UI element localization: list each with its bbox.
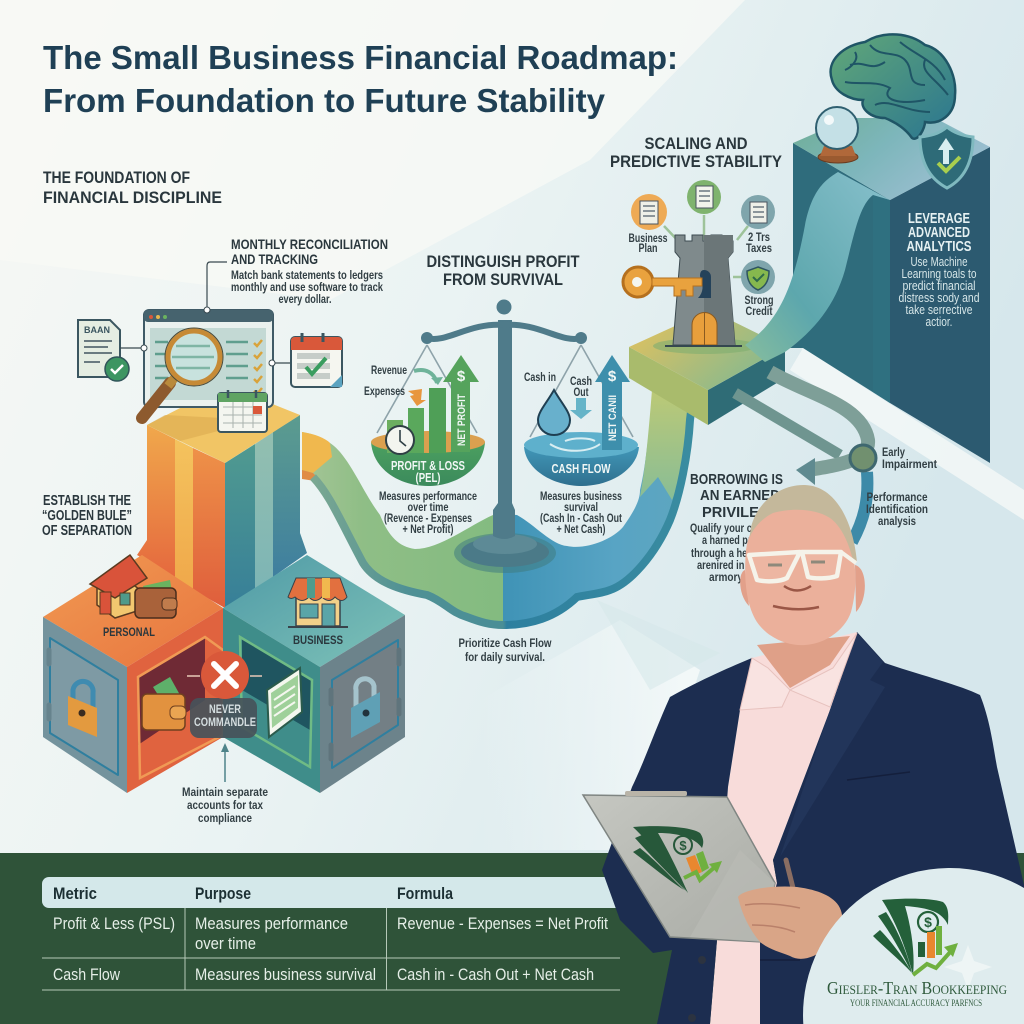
- icon: magnifying glass: [142, 328, 223, 418]
- heading: distinguish profit: FROM SURVIVAL: [443, 270, 563, 289]
- table header: Formula: [397, 884, 453, 903]
- icon: document circle: [687, 180, 721, 214]
- heading: borrowing: BORROWING IS: [690, 471, 783, 488]
- heading: distinguish profit: [426, 252, 580, 289]
- clipboard highlight: [690, 850, 775, 942]
- table header: Purpose: [195, 884, 251, 903]
- block top face: [793, 118, 990, 200]
- text: profit and loss description: (Revence - Expenses: [384, 511, 472, 525]
- text: borrowing description: [690, 521, 772, 584]
- panel: profit and loss pan: [364, 345, 485, 486]
- safe door: [332, 640, 398, 768]
- label: performance identification: Performance: [866, 490, 928, 504]
- finger lines: [745, 904, 800, 932]
- label: personal: PERSONAL: [103, 625, 155, 639]
- label: pan title: (PEL): [416, 471, 440, 485]
- arrow: net cash: $: [608, 368, 617, 385]
- hair: [750, 485, 857, 562]
- table row: profit and loss: [53, 914, 608, 953]
- icon: monitor spreadsheet: [144, 307, 273, 407]
- icon: orange padlock: [68, 681, 97, 737]
- panel: personal vault: [43, 555, 223, 793]
- labels: cash in and out: Cash in: [524, 370, 556, 384]
- text: borrowing description: Qualify your credit: [690, 521, 772, 535]
- pen: [786, 860, 793, 888]
- icon: crystal ball: [816, 107, 858, 163]
- ribbon: yellow start: [302, 432, 332, 473]
- collar: [740, 633, 857, 710]
- heading: leverage analytics: ANALYTICS: [906, 239, 972, 255]
- arrow: net cash: NET CANII: [607, 395, 619, 441]
- text: borrowing description: arenired in your: [697, 558, 767, 572]
- text: borrowing description: armory.: [709, 570, 745, 584]
- door hinges: [331, 650, 399, 759]
- table header: [42, 877, 640, 908]
- table row: profit and loss: Revenue - Expenses = Net Profit: [397, 914, 608, 933]
- arrows: revenue and expenses: [408, 370, 443, 406]
- label: never commandle: NEVER: [209, 702, 241, 716]
- icon: credit shield circle: [741, 260, 775, 294]
- safe door: [50, 638, 118, 775]
- icon: business plan circle: [631, 194, 667, 230]
- icon: clock: [386, 426, 414, 454]
- person with clipboard: [583, 485, 1024, 1024]
- icon: water drop: [538, 390, 570, 435]
- text: prioritize cash flow: for daily survival.: [465, 650, 545, 664]
- labels: revenue and expenses: [364, 363, 407, 398]
- label: strong credit: Credit: [746, 304, 773, 318]
- heading: borrowing: PRIVILEGE: [702, 504, 780, 521]
- icon: wallet inside vault: [142, 677, 186, 730]
- text: monthly description: Match bank statements to ledgers: [231, 268, 383, 282]
- company name: Giesler-Tran Bookkeeping: [827, 978, 1007, 998]
- text: separate accounts: [182, 785, 268, 825]
- tall analytics block: [785, 118, 990, 463]
- recess: personal: [138, 637, 205, 745]
- table row: cash flow: [53, 965, 594, 984]
- arrow: up to vaults: [221, 743, 229, 782]
- heading: leverage analytics: ADVANCED: [908, 225, 970, 241]
- clipboard: [583, 795, 775, 942]
- heading: borrowing: AN EARNED: [700, 487, 780, 504]
- icon: balance scale: [421, 300, 587, 573]
- label: never commandle: [190, 698, 257, 738]
- heading: scaling: PREDICTIVE STABILITY: [610, 152, 783, 171]
- roadmap ribbon: [302, 390, 697, 625]
- icon: taxes circle: [741, 195, 775, 229]
- labels: revenue and expenses: Expenses: [364, 384, 405, 398]
- text: borrowing description: through a healthy: [691, 546, 769, 560]
- ribbon: rising green section: [640, 390, 697, 500]
- text: profit and loss description: over time: [408, 500, 449, 514]
- heading: the foundation: THE FOUNDATION OF: [43, 168, 190, 187]
- text: monthly description: monthly and use software to track: [231, 280, 383, 294]
- sparkle: [944, 945, 992, 990]
- heading: borrowing: [690, 471, 783, 521]
- ribbon edge: [313, 395, 693, 625]
- clipboard logo: $: [679, 838, 687, 853]
- text: prioritize cash flow: Prioritize Cash Flow: [458, 636, 552, 650]
- door hinges: [46, 650, 52, 719]
- label: never commandle: COMMANDLE: [194, 715, 256, 729]
- text: profit and loss description: + Net Profit): [402, 522, 454, 536]
- circle: early impairment marker: [850, 445, 876, 471]
- upward ribbon: [745, 172, 890, 362]
- logo badge: [803, 868, 1024, 1024]
- label: business: BUSINESS: [293, 633, 343, 647]
- text: analytics description: take serrective: [906, 303, 973, 317]
- tower platform: [629, 310, 785, 425]
- label: pan title: PROFIT & LOSS: [391, 459, 465, 473]
- label: pan title: [391, 459, 465, 485]
- table row: profit and loss: Measures performance: [195, 914, 348, 933]
- icon: no-mixing cross: [187, 651, 262, 699]
- label: cash flow: CASH FLOW: [552, 462, 611, 476]
- face: [745, 505, 855, 645]
- icon: brain: [831, 34, 955, 139]
- panel: business vault: [223, 555, 405, 793]
- text: cash flow description: (Cash In - Cash Out: [540, 511, 622, 525]
- bottom band: [0, 853, 1024, 1024]
- text: cash flow description: + Net Cash): [556, 522, 606, 536]
- text: cash flow description: Measures business: [540, 489, 622, 503]
- text: separate accounts: compliance: [198, 811, 252, 825]
- shirt: [710, 632, 857, 1024]
- ribbon: blue half: [503, 420, 690, 625]
- labels: revenue and expenses: Revenue: [371, 363, 407, 377]
- text: cash flow description: survival: [564, 500, 598, 514]
- label: early impairment: [882, 445, 937, 471]
- text: analytics description: distress sody and: [898, 291, 980, 305]
- arrow: net profit: $: [457, 368, 466, 385]
- comparison table: [42, 877, 640, 990]
- label: business plan: [628, 231, 668, 255]
- eyes: [768, 562, 825, 565]
- icon: house: [90, 555, 147, 618]
- table row: cash flow: Cash in - Cash Out + Net Cash: [397, 965, 594, 984]
- ears: [740, 565, 865, 612]
- text: analytics description: predict financial: [902, 279, 976, 293]
- icon: small calendar: [218, 390, 267, 432]
- label: performance identification: Identification: [866, 502, 928, 516]
- labels: cash in and out: [524, 370, 592, 399]
- heading: scaling: SCALING AND: [644, 134, 748, 153]
- grey curved arrows: [735, 372, 868, 542]
- heading: scaling: [610, 134, 783, 171]
- arrow: cash out: [570, 398, 592, 419]
- label: strong credit: Strong: [744, 293, 774, 307]
- text: cash flow description: [540, 489, 622, 536]
- heading: distinguish profit: DISTINGUISH PROFIT: [426, 252, 580, 271]
- text: prioritize cash flow: [458, 636, 552, 664]
- label: performance identification: analysis: [878, 514, 916, 528]
- block right face: [890, 147, 990, 463]
- glasses: [749, 552, 856, 581]
- icon: castle tower: [664, 215, 748, 346]
- heading: golden rule: “GOLDEN BULE”: [42, 508, 132, 524]
- column: foundation pillar: [137, 385, 307, 608]
- text: separate accounts: Maintain separate: [182, 785, 268, 799]
- icon: storefront: [288, 578, 348, 627]
- title: The Small Business Financial Roadmap:: [43, 39, 678, 76]
- arrow: net profit: NET PROFIT: [456, 394, 468, 446]
- heading: golden rule: OF SEPARATION: [42, 523, 132, 539]
- label: early impairment: Impairment: [882, 457, 937, 471]
- text: separate accounts: accounts for tax: [187, 798, 263, 812]
- text: analytics description: actior.: [926, 315, 952, 329]
- bar chart: [387, 388, 446, 453]
- label: business plan: Plan: [638, 241, 658, 255]
- heading: golden rule: ESTABLISH THE: [43, 493, 131, 509]
- heading: leverage analytics: LEVERAGE: [908, 211, 970, 227]
- arrow: net cash: [595, 355, 630, 450]
- jacket: [602, 632, 1024, 1024]
- label: taxes: Taxes: [746, 241, 772, 255]
- text: borrowing description: a harned profile: [702, 533, 770, 547]
- label: business plan: Business: [628, 231, 668, 245]
- icon: shield: [920, 127, 973, 188]
- arrow: net profit: [443, 355, 479, 452]
- panel: cash flow pan: [524, 345, 639, 486]
- neck: [757, 636, 850, 688]
- hand: [738, 887, 842, 959]
- tagline: YOUR FINANCIAL ACCURACY PARFNCS: [850, 999, 982, 1009]
- text: analytics description: [898, 255, 980, 329]
- logo mark: [873, 899, 958, 975]
- heading: the foundation: [43, 168, 222, 207]
- table row: cash flow: Cash Flow: [53, 965, 121, 984]
- text: monthly description: [231, 268, 383, 306]
- text: analytics description: Use Machine: [910, 255, 968, 269]
- logo mark: $: [924, 914, 932, 930]
- heading: leverage analytics: [906, 211, 972, 255]
- icon: blue padlock: [351, 679, 380, 738]
- icon: calendar with check: [269, 333, 342, 387]
- recess: business: [242, 637, 312, 730]
- text: analytics description: Learning toals to: [902, 267, 977, 281]
- heading: monthly reconciliation: [207, 236, 388, 310]
- table row: profit and loss: Profit & Less (PSL): [53, 914, 175, 933]
- label: performance identification: [866, 490, 928, 528]
- text: monthly description: every dollar.: [278, 292, 332, 306]
- heading: monthly reconciliation: AND TRACKING: [231, 251, 318, 267]
- label: taxes: [746, 230, 772, 255]
- label: taxes: 2 Trs: [748, 230, 770, 244]
- heading: golden rule: [42, 493, 132, 539]
- label: early impairment: Early: [882, 445, 905, 459]
- block left face: [785, 143, 890, 403]
- icon: wallet on personal: [135, 580, 177, 618]
- icon: bank document: [78, 320, 147, 381]
- title: [43, 39, 678, 119]
- icon: golden key: [623, 267, 702, 297]
- ribbon: green half: [302, 432, 503, 625]
- text: profit and loss description: [379, 489, 477, 536]
- heading: monthly reconciliation: MONTHLY RECONCILIATION: [231, 236, 388, 252]
- icon: ledger book: [267, 668, 302, 737]
- labels: cash in and out: Cash: [570, 374, 592, 388]
- text: profit and loss description: Measures performance: [379, 489, 477, 503]
- table header: Metric: [53, 884, 97, 903]
- icon: bank document: BAAN: [84, 325, 110, 335]
- labels: cash in and out: Out: [574, 385, 588, 399]
- clipboard logo: [633, 826, 722, 893]
- title: From Foundation to Future Stability: [43, 82, 606, 119]
- nose and smile: [773, 586, 819, 609]
- heading: the foundation: FINANCIAL DISCIPLINE: [43, 188, 222, 207]
- table row: cash flow: Measures business survival: [195, 965, 376, 984]
- table row: profit and loss: over time: [195, 934, 256, 953]
- label: strong credit: [744, 293, 774, 318]
